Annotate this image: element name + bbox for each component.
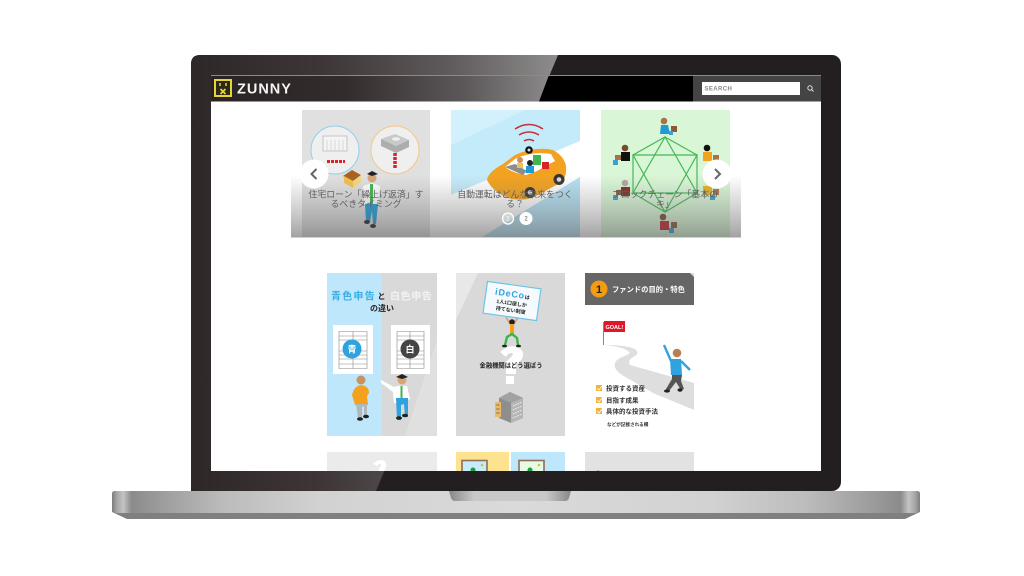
card heading [331,290,432,313]
slide captions: キ」 [656,199,674,209]
iDeCo sign [483,281,541,321]
slide captions: ブロックチェーン「基本の [612,188,718,200]
wifi signal [515,124,543,141]
card header: ファンドの目的・特色 [612,285,686,294]
car body [487,149,566,200]
goal flag: GOAL! [606,325,623,331]
hexagon network [633,137,697,212]
laptop base [112,491,920,519]
slide captions: る？ [506,199,524,209]
tax form icons: 青 [347,344,357,354]
previous arrow [300,160,328,188]
tax form icons: 白 [405,344,415,354]
slide 3: blockchain [601,110,730,237]
pager dots: 1 [506,216,510,222]
next arrow [702,160,732,188]
card heading: の違い [370,303,394,313]
laptop bezel [191,55,841,491]
pager dots: 2 [524,216,528,222]
checklist: 具体的な投資手法 [606,406,658,416]
slide captions [309,188,718,209]
iDeCo sign: 1人1口座しか [496,298,527,309]
card header: 1 [596,284,602,296]
person in orange [352,376,369,421]
logo: ZUNNY [215,80,292,98]
card heading: 白色申告 [390,290,432,302]
search box: SEARCH [704,86,732,92]
building icon [495,392,523,423]
slide 2: autonomous car [451,110,580,237]
site header bar [211,75,821,102]
man in white shirt [381,374,410,420]
running person [664,345,690,393]
logo: ZUNNY: ZUNNY [237,82,292,98]
carousel [291,110,741,238]
checklist: 投資する資産 [606,384,646,392]
tax form icons [333,325,430,374]
iDeCo sign: 持てない制度 [495,305,526,316]
carousel fade overlay [291,182,741,238]
slide captions: 自動運転はどんな未来をつく [457,188,573,200]
checklist: などが記載される欄 [607,421,649,428]
card heading: と [378,292,386,301]
question mark [500,346,523,384]
slide 1: home loan [302,110,430,237]
goal flag [604,321,625,345]
iDeCo sign: iDeCoは [495,287,531,302]
card heading: 青色申告 [331,290,376,302]
card caption: 金融機関はどう選ぼう [480,360,542,370]
pager dots [502,212,532,225]
bottom row cards [327,452,694,472]
person holding sign [502,317,521,347]
card: blue vs white tax return [327,273,437,436]
search box [702,82,814,95]
card: iDeCo [456,273,565,436]
card: fund purpose [585,273,694,428]
slide captions: るべきタイミング [330,198,402,209]
slide captions: 住宅ローン「繰上げ返済」す [309,188,424,200]
checklist: 目指す成果 [606,396,639,404]
checklist [596,384,658,428]
screen [211,75,821,472]
card header [585,273,694,305]
road [606,345,694,410]
